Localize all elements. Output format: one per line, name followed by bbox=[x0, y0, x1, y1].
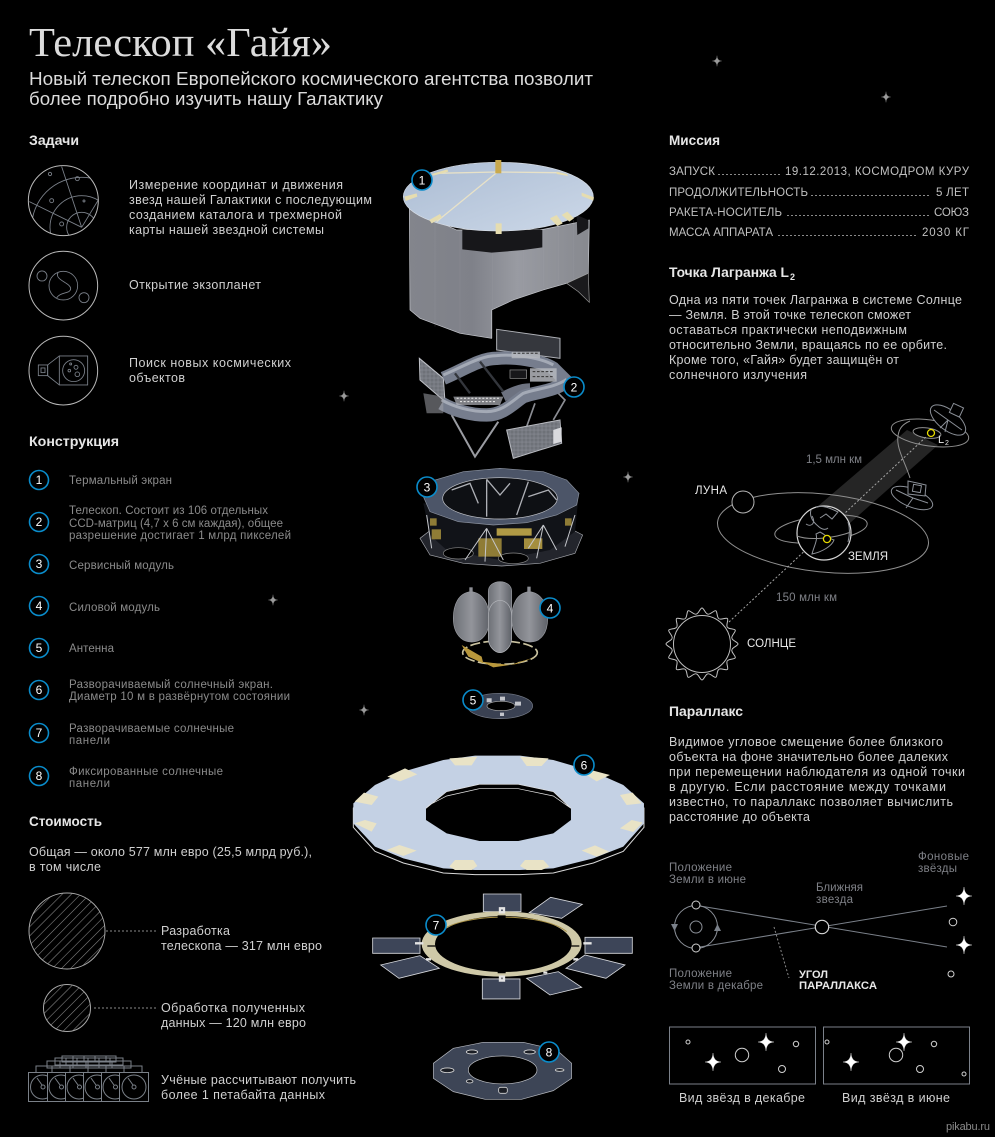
parallax description: при перемещении наблюдателя из одной точки bbox=[669, 765, 965, 779]
panel: June star view bbox=[824, 1027, 970, 1084]
task text: exoplanets: Открытие экзопланет bbox=[129, 278, 261, 292]
watermark: pikabu.ru bbox=[946, 1121, 990, 1133]
label: data processing cost bbox=[161, 1001, 306, 1030]
label: background stars: Фоновые bbox=[918, 851, 969, 863]
task text: coordinates bbox=[129, 178, 372, 237]
label: development cost: Разработка bbox=[161, 924, 230, 938]
label: petabyte bbox=[161, 1073, 356, 1102]
light cone bbox=[817, 430, 938, 523]
label: moon: ЛУНА bbox=[695, 485, 727, 497]
label: earth in December: Земли в декабре bbox=[669, 980, 763, 992]
near star bbox=[815, 920, 829, 934]
Lagrange description: оставаться практически неподвижным bbox=[669, 323, 907, 337]
cost summary: в том числе bbox=[29, 860, 101, 874]
parallax description bbox=[669, 735, 965, 824]
task text: new objects: Поиск новых космических bbox=[129, 356, 292, 370]
badge 1 bbox=[412, 170, 432, 190]
task text: coordinates: Измерение координат и движения bbox=[129, 178, 343, 192]
label: near star bbox=[816, 882, 863, 906]
legend item 6: Разворачиваемый солнечный экран. bbox=[69, 679, 273, 691]
label: development cost: телескопа — 317 млн евро bbox=[161, 939, 322, 953]
heading: Lagrange point: Точка Лагранжа L bbox=[669, 264, 789, 280]
badge 8 bbox=[539, 1042, 559, 1062]
mission table: СОЮЗ bbox=[934, 207, 969, 219]
legend item 2: CCD-матриц (4,7 х 6 см каждая), общее bbox=[69, 518, 283, 530]
caption: June view: Вид звёзд в июне bbox=[842, 1091, 950, 1105]
diagram: Lagrange orbits bbox=[666, 399, 971, 680]
label: near star: звезда bbox=[816, 894, 854, 906]
badge 7 bbox=[426, 915, 446, 935]
badge 6: 6 bbox=[581, 758, 588, 772]
badge 3 bbox=[417, 477, 437, 497]
cost summary: Общая — около 577 млн евро (25,5 млрд руб.), bbox=[29, 845, 312, 859]
legend item 8: 8 bbox=[36, 769, 43, 783]
legend item 3 bbox=[30, 554, 174, 574]
task text: coordinates: созданием каталога и трехмерной bbox=[129, 208, 342, 222]
mission table bbox=[669, 166, 970, 239]
legend item 1: 1 bbox=[36, 473, 43, 487]
legend item 2: Телескоп. Состоит из 106 отдельных bbox=[69, 505, 268, 517]
task text: new objects bbox=[129, 356, 292, 385]
task text: coordinates: звезд нашей Галактики с последующим bbox=[129, 193, 372, 207]
legend item 3: Сервисный модуль bbox=[69, 560, 174, 572]
panel: December star view bbox=[670, 1027, 816, 1084]
dotted lines bbox=[729, 436, 927, 622]
mission table: ПРОДОЛЖИТЕЛЬНОСТЬ bbox=[669, 187, 808, 199]
legend item 2: 2 bbox=[36, 515, 43, 529]
legend item 8: панели bbox=[69, 778, 110, 790]
badge 5: 5 bbox=[470, 694, 477, 708]
legend item 2: разрешение достигает 1 млрд пикселей bbox=[69, 530, 291, 542]
spacecraft part 3: service module bbox=[420, 468, 583, 566]
sight lines bbox=[700, 906, 947, 947]
mission table: ЗАПУСК bbox=[669, 166, 715, 178]
heading: mission: Миссия bbox=[669, 132, 720, 148]
parallax description: Видимое угловое смещение более близкого bbox=[669, 735, 943, 749]
legend item 5 bbox=[30, 638, 115, 658]
label: 150 million km: 150 млн км bbox=[776, 592, 837, 604]
legend item 1: Термальный экран bbox=[69, 475, 172, 487]
subtitle: более подробно изучить нашу Галактику bbox=[29, 89, 383, 109]
badge 3: 3 bbox=[424, 480, 431, 494]
spacecraft part 6: sun shield bbox=[353, 756, 644, 875]
legend item 6 bbox=[30, 679, 290, 703]
mission table: 5 ЛЕТ bbox=[936, 187, 969, 199]
legend item 4: 4 bbox=[36, 599, 43, 613]
legend item 8: Фиксированные солнечные bbox=[69, 766, 223, 778]
legend item 7: 7 bbox=[36, 726, 43, 740]
badge 4: 4 bbox=[547, 602, 554, 616]
diagram: parallax geometry bbox=[671, 887, 972, 978]
spacecraft part 8: fixed solar panels bbox=[433, 1042, 572, 1099]
background stars bbox=[948, 887, 972, 977]
legend item 5: Антенна bbox=[69, 643, 115, 655]
label: 1.5 million km: 1,5 млн км bbox=[806, 454, 862, 466]
legend item 3: 3 bbox=[36, 557, 43, 571]
heading: Lagrange point: 2 bbox=[790, 272, 795, 282]
legend item 7 bbox=[30, 723, 234, 747]
chart: development cost circle bbox=[29, 893, 156, 969]
legend item 1 bbox=[30, 470, 172, 490]
label: near star: Ближняя bbox=[816, 882, 863, 894]
label: earth in December: Положение bbox=[669, 968, 732, 980]
icon: exoplanets bbox=[29, 251, 98, 320]
Lagrange description: — Земля. В этой точке телескоп сможет bbox=[669, 308, 911, 322]
task text: coordinates: карты нашей звездной системы bbox=[129, 223, 324, 237]
badge 6 bbox=[574, 755, 594, 775]
legend item 4: Силовой модуль bbox=[69, 602, 160, 614]
L2 point bbox=[928, 430, 934, 436]
parallax description: известно, то параллакс позволяет вычислить bbox=[669, 795, 953, 809]
Lagrange description: солнечного излучения bbox=[669, 368, 807, 382]
badge 4 bbox=[540, 598, 560, 618]
title: Телескоп «Гайя» bbox=[29, 19, 332, 65]
parallax description: расстояние до объекта bbox=[669, 810, 810, 824]
badge 5 bbox=[463, 690, 483, 710]
subtitle bbox=[29, 69, 593, 109]
badge 8: 8 bbox=[546, 1046, 553, 1060]
earth orbit bbox=[671, 901, 721, 952]
Lagrange description bbox=[669, 293, 962, 382]
spacecraft part 5: antenna bbox=[467, 693, 533, 719]
earth bbox=[797, 506, 851, 560]
label: parallax angle: УГОЛ bbox=[799, 969, 828, 981]
icon: stack of disks bbox=[28, 1056, 148, 1102]
label: development cost bbox=[161, 924, 322, 953]
legend item 4 bbox=[30, 596, 160, 616]
parallax description: в другую. Если расстояние между точками bbox=[669, 780, 946, 794]
spacecraft part 4: propulsion module bbox=[453, 582, 548, 667]
task text: new objects: объектов bbox=[129, 371, 185, 385]
satellite bottom bbox=[888, 481, 936, 515]
satellite top bbox=[925, 399, 971, 441]
badge 7: 7 bbox=[433, 918, 440, 932]
heading: tasks: Задачи bbox=[29, 132, 79, 148]
label: data processing cost: Обработка полученных bbox=[161, 1001, 306, 1015]
label: earth in June: Земли в июне bbox=[669, 874, 746, 886]
subtitle: Новый телескоп Европейского космического агентства позволит bbox=[29, 69, 593, 89]
parallax angle pointer bbox=[774, 927, 789, 978]
moon bbox=[732, 491, 754, 513]
mission table: 2030 КГ bbox=[922, 227, 970, 239]
L2 label: L bbox=[938, 434, 944, 446]
spacecraft part 1: thermal shield bbox=[403, 160, 594, 338]
spacecraft part 7: solar panels bbox=[373, 894, 632, 999]
sun bbox=[666, 608, 738, 680]
legend item 2 bbox=[30, 505, 291, 542]
legend item 7: панели bbox=[69, 735, 110, 747]
mission table: РАКЕТА-НОСИТЕЛЬ bbox=[669, 207, 782, 219]
label: parallax angle bbox=[799, 969, 877, 992]
L2 label: 2 bbox=[945, 440, 949, 447]
spacecraft part 2: telescope bbox=[419, 329, 567, 458]
label: sun: СОЛНЦЕ bbox=[747, 638, 796, 650]
parallax description: объекта на фоне значительно более далеких bbox=[669, 750, 949, 764]
badge 2 bbox=[564, 377, 584, 397]
heading: cost: Стоимость bbox=[29, 813, 102, 829]
cost summary bbox=[29, 845, 312, 874]
background stars bbox=[268, 56, 891, 715]
label: parallax angle: ПАРАЛЛАКСА bbox=[799, 980, 877, 992]
legend item 8 bbox=[30, 766, 223, 790]
badge 1: 1 bbox=[419, 174, 426, 188]
badge 2: 2 bbox=[571, 380, 578, 394]
label: background stars bbox=[918, 851, 969, 875]
heading: parallax: Параллакс bbox=[669, 703, 743, 719]
label: earth in June bbox=[669, 862, 746, 886]
label: petabyte: Учёные рассчитывают получить bbox=[161, 1073, 356, 1087]
legend item 6: 6 bbox=[36, 683, 43, 697]
icon: star map bbox=[28, 165, 99, 236]
label: earth: ЗЕМЛЯ bbox=[848, 551, 888, 563]
L2 label bbox=[938, 434, 949, 447]
legend item 7: Разворачиваемые солнечные bbox=[69, 723, 234, 735]
label: background stars: звёзды bbox=[918, 863, 957, 875]
Lagrange description: Кроме того, «Гайя» будет защищён от bbox=[669, 353, 899, 367]
mission table: 19.12.2013, КОСМОДРОМ КУРУ bbox=[785, 166, 970, 178]
caption: December view: Вид звёзд в декабре bbox=[679, 1091, 805, 1105]
label: petabyte: более 1 петабайта данных bbox=[161, 1088, 326, 1102]
legend item 6: Диаметр 10 м в развёрнутом состоянии bbox=[69, 691, 290, 703]
Lagrange description: относительно Земли, вращаясь по ее орбите. bbox=[669, 338, 947, 352]
orbit ellipses bbox=[714, 415, 970, 583]
label: earth in June: Положение bbox=[669, 862, 732, 874]
heading: construction: Конструкция bbox=[29, 433, 119, 449]
mission table: МАССА АППАРАТА bbox=[669, 227, 773, 239]
icon: telescope objects bbox=[29, 336, 98, 405]
legend item 5: 5 bbox=[36, 641, 43, 655]
Lagrange description: Одна из пяти точек Лагранжа в системе Солнце bbox=[669, 293, 962, 307]
label: data processing cost: данных — 120 млн евро bbox=[161, 1016, 306, 1030]
label: earth in December bbox=[669, 968, 763, 992]
chart: data processing cost circle bbox=[44, 984, 156, 1032]
